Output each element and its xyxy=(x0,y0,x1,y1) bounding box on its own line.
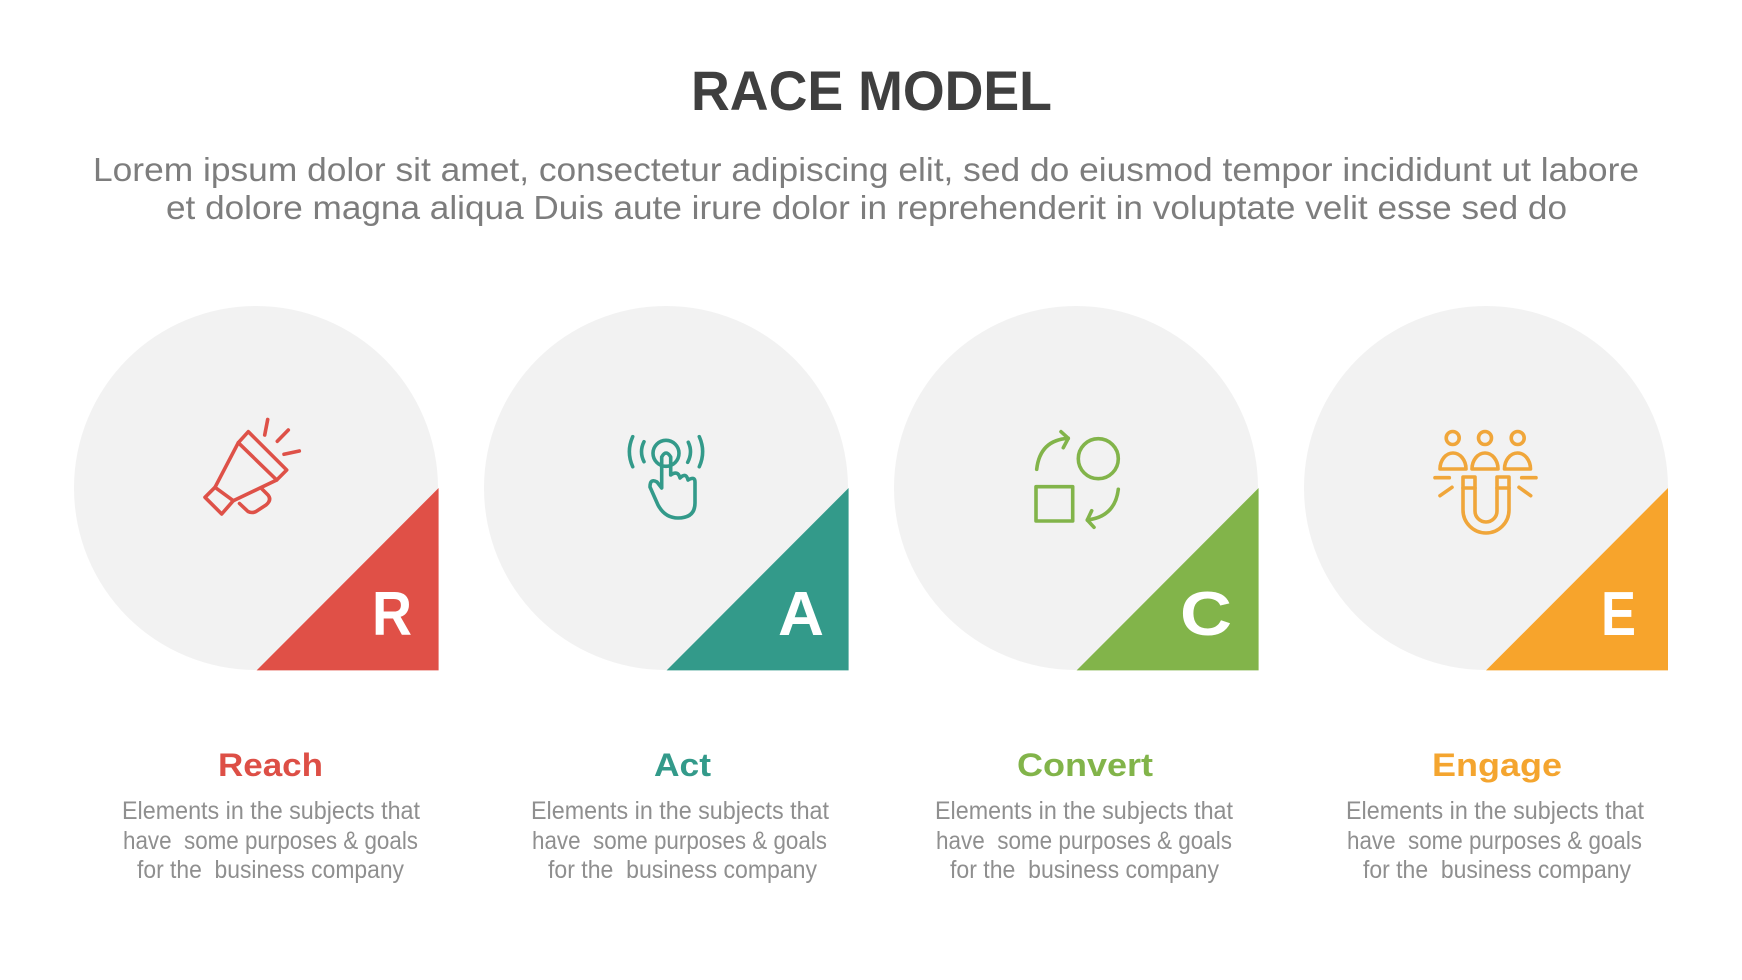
heading: Act: Act xyxy=(654,747,711,783)
subtitle text: et dolore magna aliqua Duis aute irure dolor in reprehenderit in voluptate velit esse sed do xyxy=(166,189,1567,226)
corner triangle: Convert xyxy=(1077,488,1259,670)
description: Engage: for the business company xyxy=(1363,856,1631,884)
circle: Reach xyxy=(74,306,438,670)
heading: Reach: Reach xyxy=(218,747,323,783)
description: Engage: have some purposes & goals xyxy=(1347,827,1642,855)
corner triangle: Engage xyxy=(1486,488,1668,670)
corner triangle: Act xyxy=(667,488,849,670)
corner triangle: Reach xyxy=(257,488,439,670)
description: Act: Elements in the subjects that xyxy=(531,797,829,825)
letter C: C xyxy=(1180,580,1232,649)
letter A: A xyxy=(778,580,824,649)
title: RACE MODEL xyxy=(691,59,1052,122)
circle: Act xyxy=(484,306,848,670)
circle: Convert xyxy=(894,306,1258,670)
heading: Engage: Engage xyxy=(1432,747,1562,783)
panel: Convert xyxy=(894,306,1259,884)
letter R: R xyxy=(372,580,412,649)
description: Convert xyxy=(935,797,1233,884)
description: Reach xyxy=(122,797,420,884)
description: Convert: for the business company xyxy=(950,856,1219,884)
icon: people magnet xyxy=(1435,432,1536,533)
description: Act: have some purposes & goals xyxy=(532,827,827,855)
panel: Act xyxy=(484,306,849,884)
description: Convert: Elements in the subjects that xyxy=(935,797,1233,825)
panel: Reach xyxy=(74,306,439,884)
icon: shapes cycle xyxy=(1036,432,1118,527)
description: Act: for the business company xyxy=(548,856,817,884)
subtitle text xyxy=(93,151,1639,226)
description: Act xyxy=(531,797,829,884)
description: Engage: Elements in the subjects that xyxy=(1346,797,1644,825)
description: Reach: Elements in the subjects that xyxy=(122,797,420,825)
icon: touch hand xyxy=(629,437,703,518)
description: Reach: have some purposes & goals xyxy=(123,827,418,855)
heading: Convert: Convert xyxy=(1017,747,1153,783)
letter E: E xyxy=(1601,580,1636,649)
subtitle text: Lorem ipsum dolor sit amet, consectetur adipiscing elit, sed do eiusmod tempor incididunt ut labore xyxy=(93,151,1639,188)
description: Engage xyxy=(1346,797,1644,884)
panel: Engage xyxy=(1304,306,1668,884)
circle: Engage xyxy=(1304,306,1668,670)
description: Convert: have some purposes & goals xyxy=(936,827,1232,855)
description: Reach: for the business company xyxy=(137,856,404,884)
icon: megaphone xyxy=(205,420,299,514)
